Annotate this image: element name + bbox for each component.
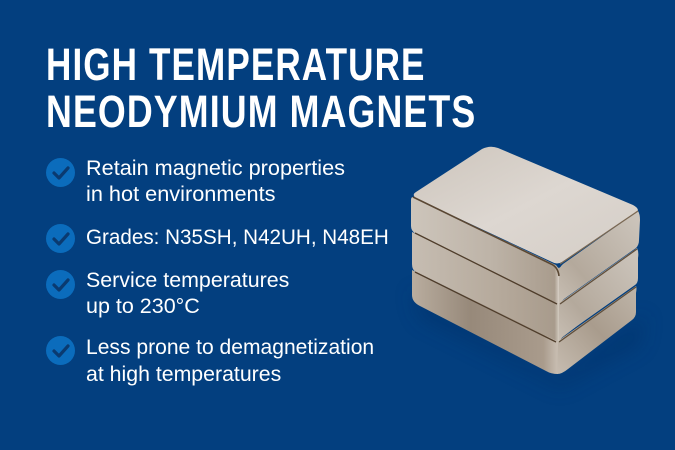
bullet list [46,156,389,386]
bullet: retain magnetic properties: Retain magnetic properties [86,156,345,180]
bullet: service temperatures: Service temperatures [86,268,289,292]
shadow under magnets [412,290,645,388]
bullet: less prone to demagnetization: at high temperatures [86,362,281,386]
title: NEODYMIUM MAGNETS [46,86,476,137]
bullet: retain magnetic properties [46,156,345,206]
bullet: grades: Grades: N35SH, N42UH, N48EH [86,225,389,249]
top magnet [411,147,640,304]
bullet: service temperatures [46,268,289,318]
bullet: retain magnetic properties: in hot environments [86,182,276,206]
bottom magnet [412,270,636,374]
middle magnet [412,232,638,342]
bullet: less prone to demagnetization [46,335,374,386]
bullet: less prone to demagnetization: Less prone to demagnetization [86,335,374,359]
title [46,39,476,137]
title: HIGH TEMPERATURE [46,39,426,90]
bullet: service temperatures: up to 230°C [86,294,200,318]
